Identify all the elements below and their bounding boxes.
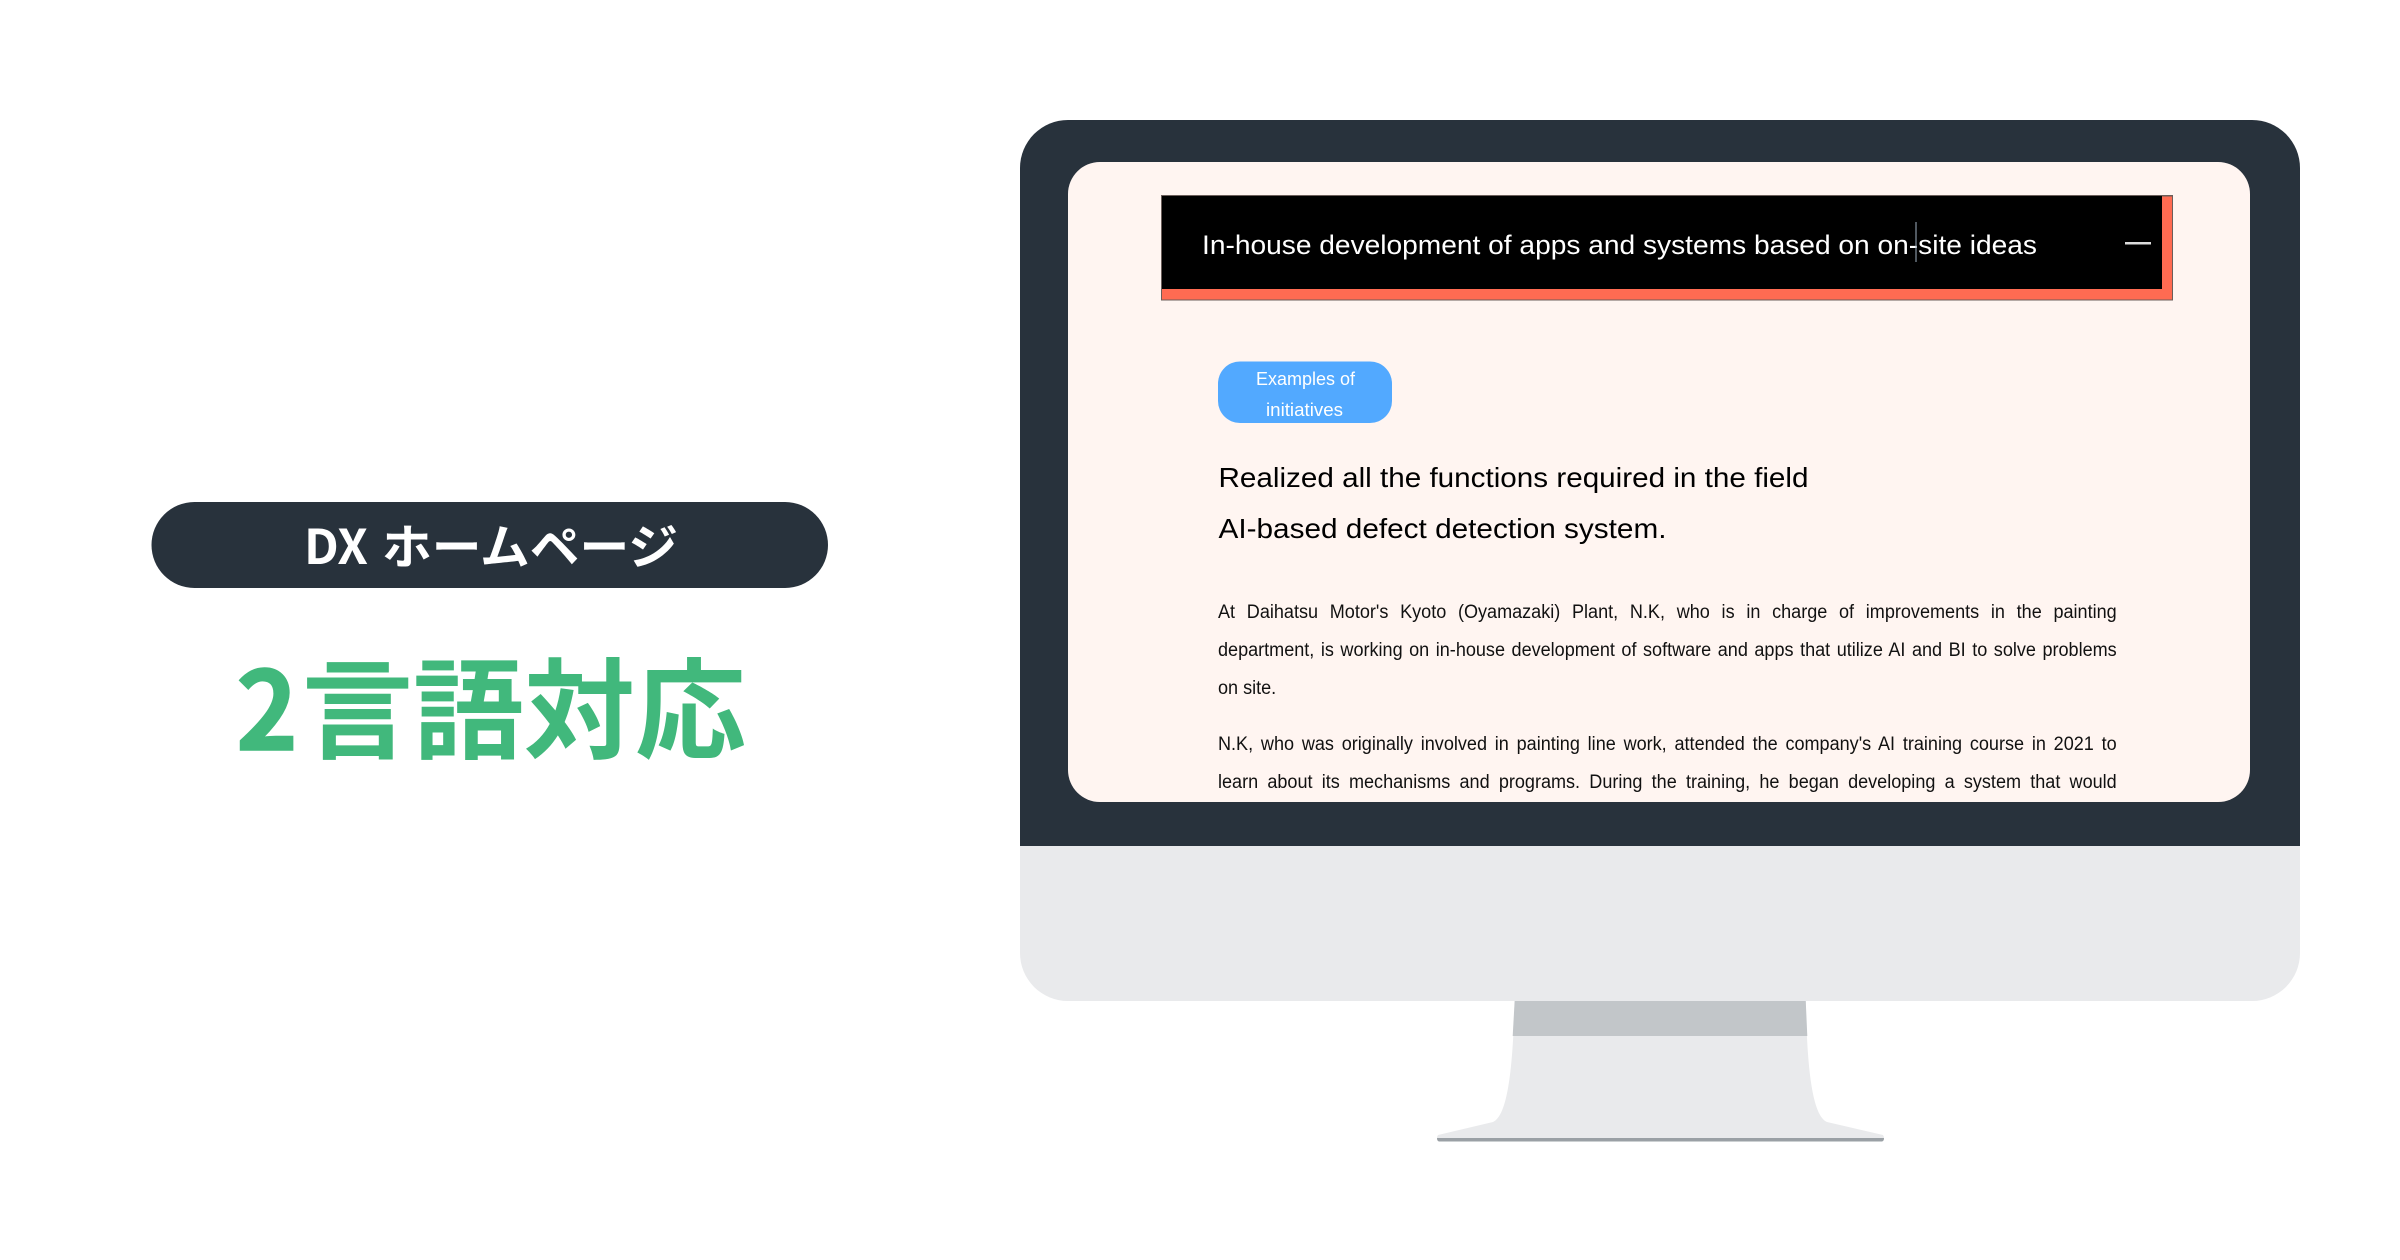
tag: examples of initiatives: Examples of bbox=[1256, 369, 1356, 389]
accordion header bar bbox=[1161, 195, 2173, 300]
article heading bbox=[1218, 462, 1808, 544]
monitor chin bbox=[1020, 846, 2300, 1001]
article body text: learn about its mechanisms and programs. During the training, he began developing a system that would bbox=[1218, 772, 2117, 793]
monitor bezel bbox=[1020, 120, 2300, 846]
article body text: department, is working on in-house development of software and apps that utilize AI and BI to solve problems bbox=[1218, 640, 2117, 661]
badge: DX homepage bbox=[152, 502, 828, 588]
article body text: N.K, who was originally involved in painting line work, attended the company's AI training course in 2021 to bbox=[1218, 734, 2117, 755]
title: two-language support: 2 bbox=[236, 625, 298, 782]
article body text: At Daihatsu Motor's Kyoto (Oyamazaki) Plant, N.K, who is in charge of improvements in the painting bbox=[1218, 602, 2117, 623]
badge: DX homepage: ホームページ bbox=[382, 508, 678, 578]
article heading: Realized all the functions required in the field bbox=[1218, 462, 1808, 493]
monitor screen bbox=[1068, 162, 2250, 802]
title: two-language support: 言語対応 bbox=[302, 625, 746, 782]
text cursor bbox=[1916, 222, 1917, 262]
tag: examples of initiatives bbox=[1218, 362, 1392, 423]
article body text: on site. bbox=[1218, 678, 1276, 699]
bar title: In-house development of apps and systems based on on-site ideas bbox=[1202, 230, 2037, 260]
badge: DX homepage: DX bbox=[304, 508, 368, 578]
article heading: AI-based defect detection system. bbox=[1218, 513, 1666, 544]
monitor stand bbox=[1437, 1000, 1884, 1142]
tag: examples of initiatives: initiatives bbox=[1266, 400, 1343, 420]
icon: collapse minus bbox=[2125, 242, 2151, 244]
